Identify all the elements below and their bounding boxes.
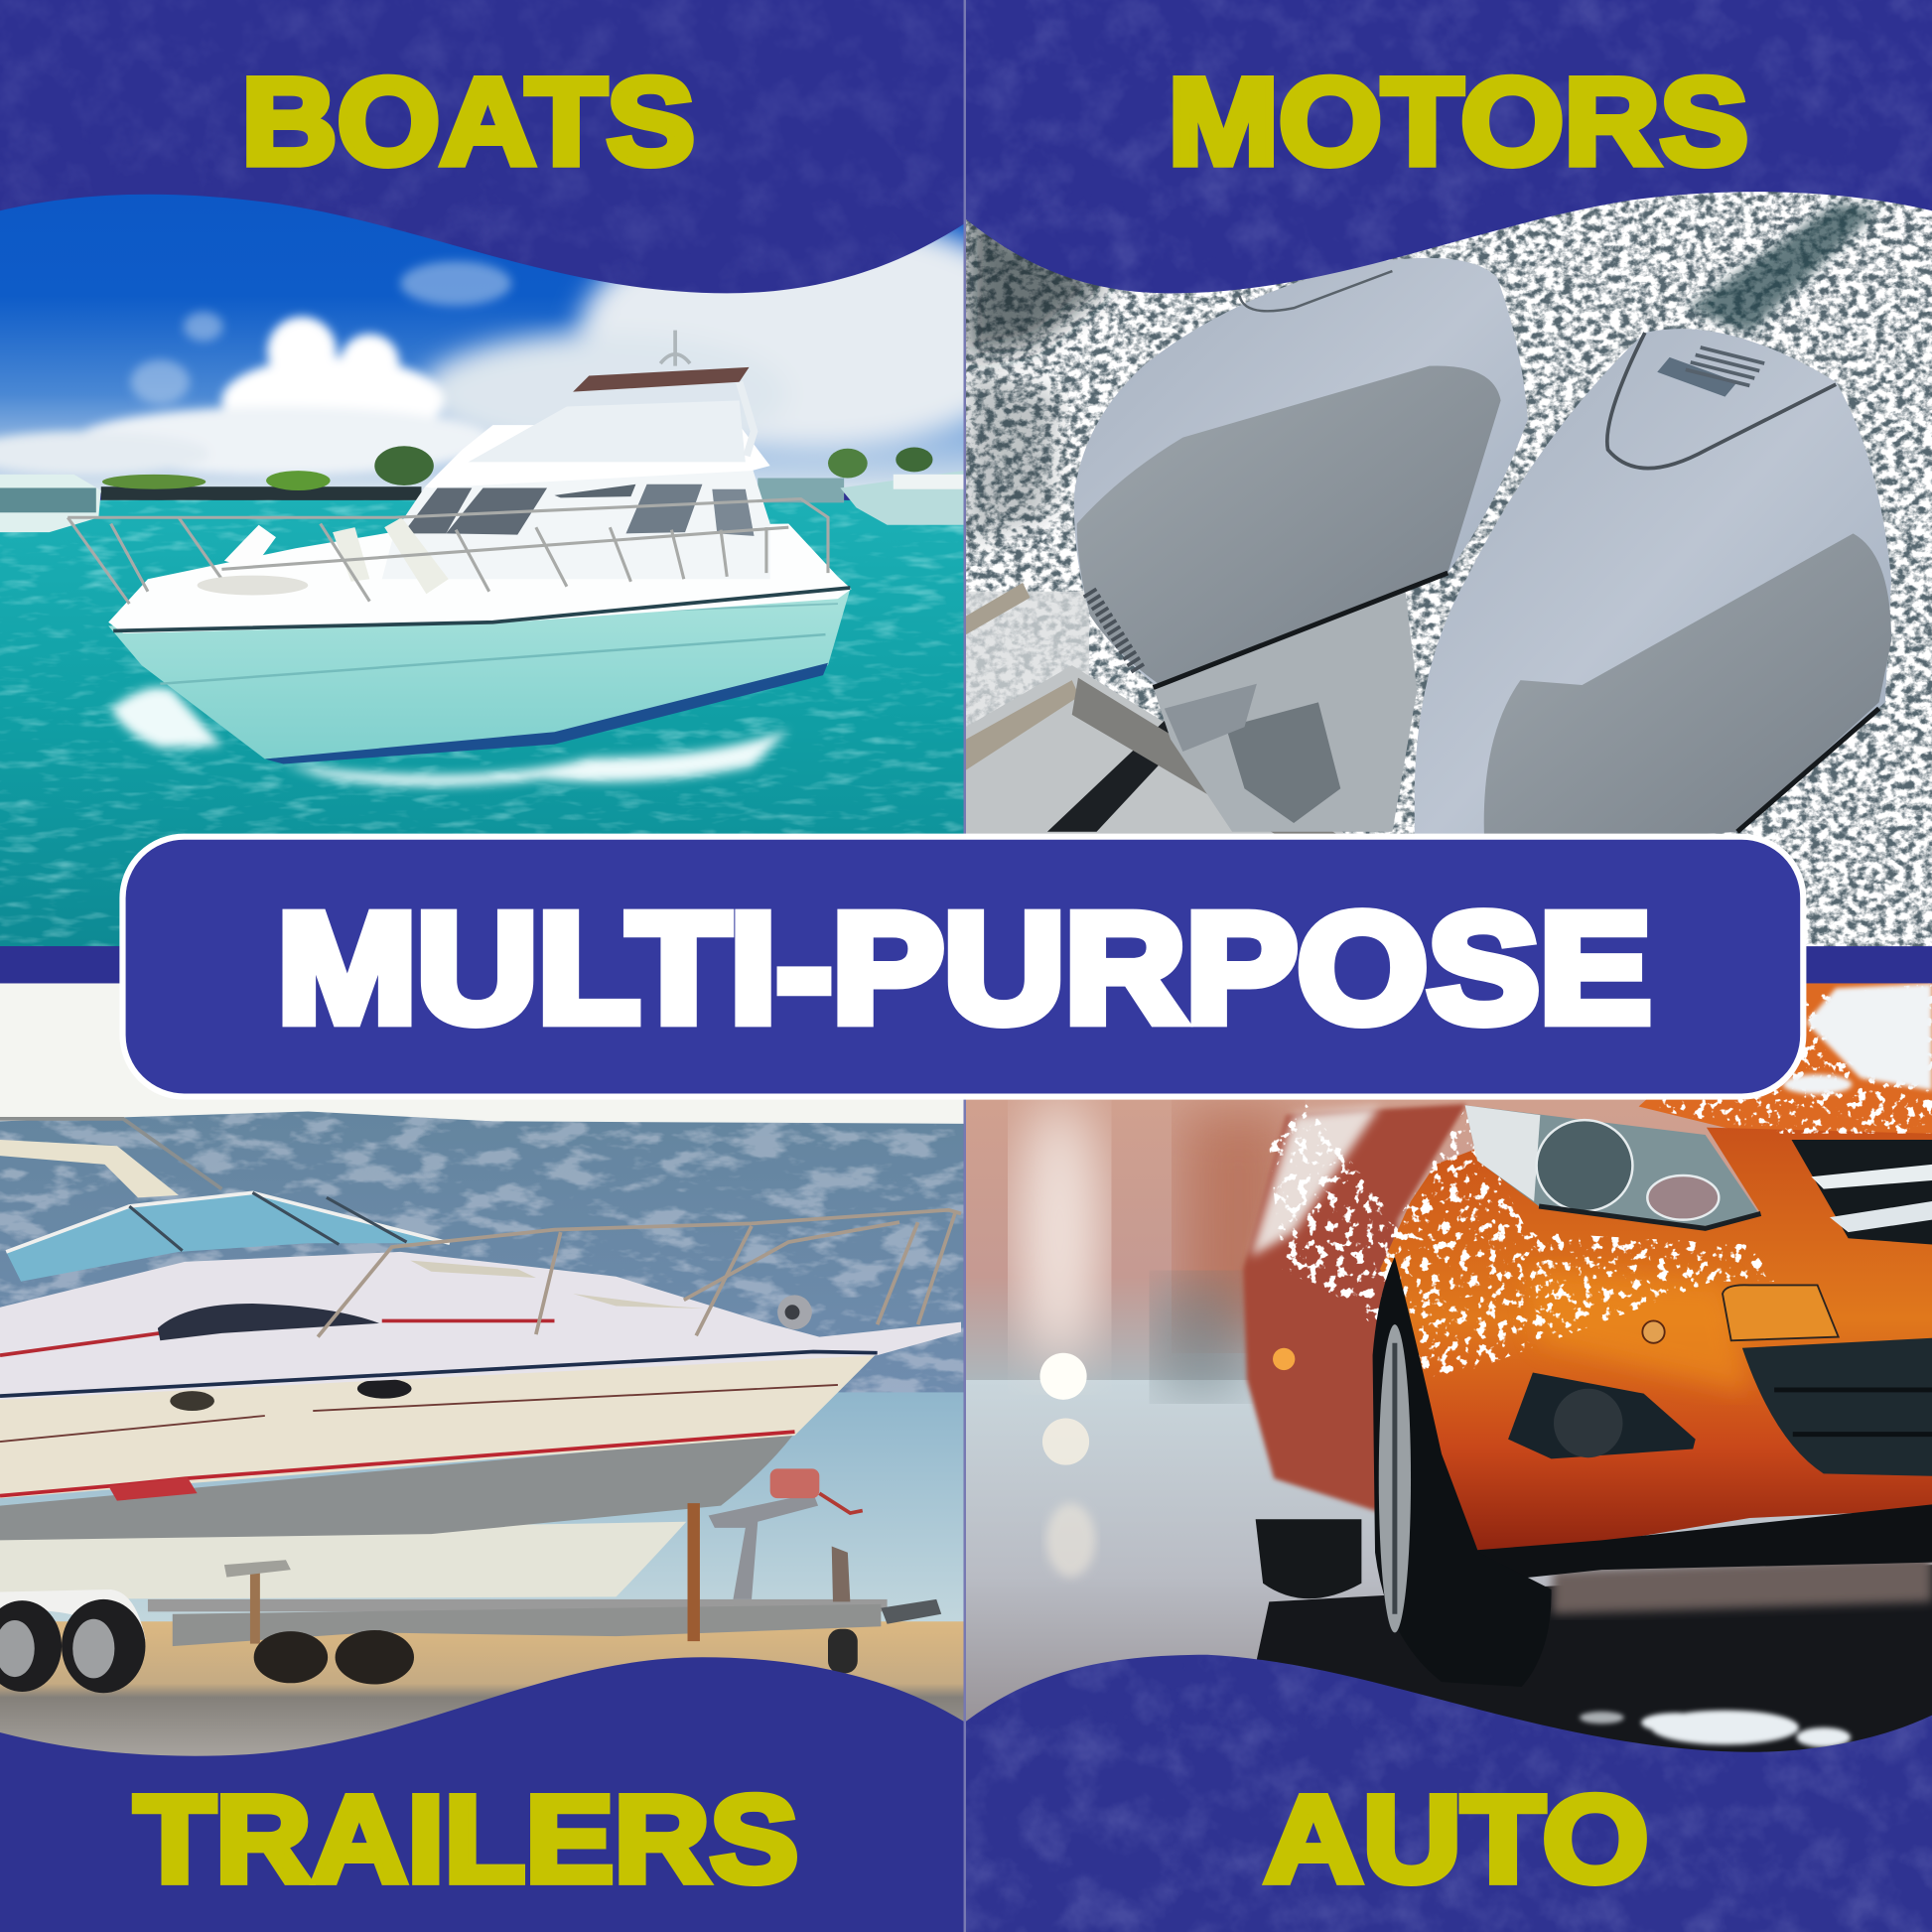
clouds [0, 215, 1047, 476]
red stripe [0, 1432, 794, 1496]
panel: trailers photo [0, 983, 964, 1759]
hull [108, 589, 850, 759]
deck hatch [198, 576, 308, 595]
bokeh lights [1039, 1353, 1095, 1578]
foamy water [966, 192, 1932, 947]
upper grille [1792, 1140, 1932, 1244]
central banner [122, 837, 1803, 1097]
trailer wheels [0, 1599, 414, 1693]
panel: motors photo [966, 192, 1932, 947]
banner title: MULTI-PURPOSE [277, 882, 1651, 1055]
fog lamp [1508, 1320, 1696, 1458]
deck hatches [410, 1261, 536, 1278]
windscreen [6, 1192, 450, 1282]
wheel arch and tyre [1373, 1257, 1552, 1687]
snowy car side [1243, 1104, 1466, 1514]
far wheel [1256, 1519, 1361, 1598]
transom and brackets [966, 583, 1417, 946]
fenders [384, 517, 449, 594]
wake foam [111, 687, 788, 786]
dark side vent [158, 1304, 379, 1340]
divider [964, 0, 966, 1932]
hillside [0, 1109, 964, 1399]
grey boot [0, 1433, 794, 1540]
trailer frame [0, 1468, 941, 1673]
wave band: auto [966, 1651, 1932, 1932]
snow on hood [1783, 983, 1932, 1094]
dark road [1232, 1565, 1932, 1774]
motor yacht [68, 331, 852, 763]
air dam grille [1723, 1285, 1932, 1476]
water [0, 500, 964, 946]
sky [0, 195, 963, 492]
headlight [1465, 1105, 1760, 1228]
port holes [170, 1391, 214, 1411]
windows [403, 487, 472, 533]
heading: trailers: TRAILERS [134, 1771, 798, 1908]
cruiser [0, 1119, 961, 1599]
right outboard cowl [1415, 329, 1891, 850]
snow flecks [1232, 983, 1932, 1378]
winch [777, 1295, 812, 1329]
rails [68, 499, 828, 604]
rails [318, 1210, 961, 1337]
sea [0, 1392, 964, 1632]
lower black valance [1477, 1504, 1932, 1583]
white deck [0, 1252, 961, 1400]
heading: motors: MOTORS [1169, 54, 1748, 191]
wave band: motors [966, 0, 1932, 296]
blurred background [966, 983, 1932, 1774]
deck [108, 523, 852, 633]
cabin [382, 466, 770, 579]
lower hull [0, 1522, 686, 1599]
flybridge canopy [573, 367, 750, 392]
heading: auto: AUTO [1264, 1771, 1649, 1908]
background boats [0, 471, 964, 532]
panel: auto photo [966, 983, 1932, 1774]
hazy sky [0, 983, 964, 1144]
heading: boats: BOATS [241, 54, 695, 191]
wave band: trailers [0, 1657, 964, 1932]
orange hood [1639, 983, 1932, 1140]
cream topsides [0, 1353, 878, 1498]
wave band: boats [0, 0, 964, 296]
panel: boats photo [0, 195, 963, 947]
snow pile on road [1580, 1711, 1851, 1747]
arch [0, 1140, 179, 1197]
bumper and fender [1380, 1128, 1932, 1553]
left outboard cowl [1074, 258, 1528, 688]
quay ground [0, 1621, 964, 1759]
distant shore [101, 446, 932, 502]
